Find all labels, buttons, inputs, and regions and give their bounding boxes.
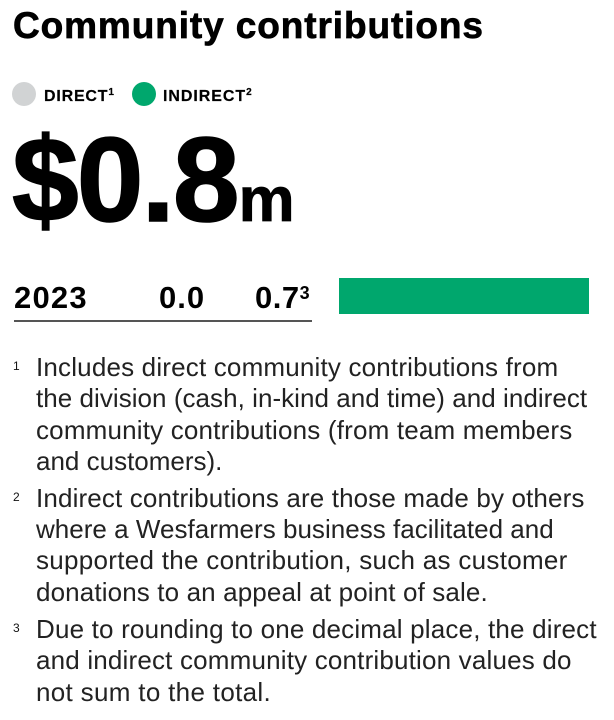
footnotes: [13, 352, 597, 707]
legend swatch: direct: [12, 82, 36, 106]
title: Community contributions: [13, 5, 484, 46]
value: indirect: 0.73: [255, 280, 310, 315]
footnote 1: community contributions (from team members: [36, 415, 572, 445]
footnote 2: donations to an appeal at point of sale.: [36, 577, 488, 607]
footnote 1: Includes direct community contributions from: [36, 352, 558, 382]
footnote 2: Indirect contributions are those made by others: [36, 483, 585, 513]
footnote 3: Due to rounding to one decimal place, the direct: [36, 614, 597, 644]
big number: $0.8m: [12, 113, 295, 247]
footnote 3: and indirect community contribution values do: [36, 645, 572, 675]
footnote 1: 1: [13, 359, 20, 373]
footnote 2: supported the contribution, such as customer: [36, 545, 568, 575]
legend: [12, 82, 252, 106]
legend label: indirect: INDIRECT2: [163, 87, 252, 105]
legend label: direct: DIRECT1: [44, 87, 114, 105]
footnote 2: [13, 483, 585, 607]
bar: indirect contribution: [339, 278, 589, 314]
footnote 3: [13, 614, 597, 707]
footnote 2: 2: [13, 490, 20, 504]
footnote 3: not sum to the total.: [36, 677, 271, 707]
row: year 2023: 2023: [14, 280, 88, 315]
legend swatch: indirect: [132, 82, 156, 106]
footnote 1: the division (cash, in-kind and time) and indirect: [36, 383, 587, 413]
footnote 2: where a Wesfarmers business facilitated and: [36, 514, 554, 544]
footnote 1: and customers).: [36, 446, 222, 476]
footnote 3: 3: [13, 621, 20, 635]
value: direct: 0.0: [159, 280, 205, 315]
footnote 1: [13, 352, 587, 476]
